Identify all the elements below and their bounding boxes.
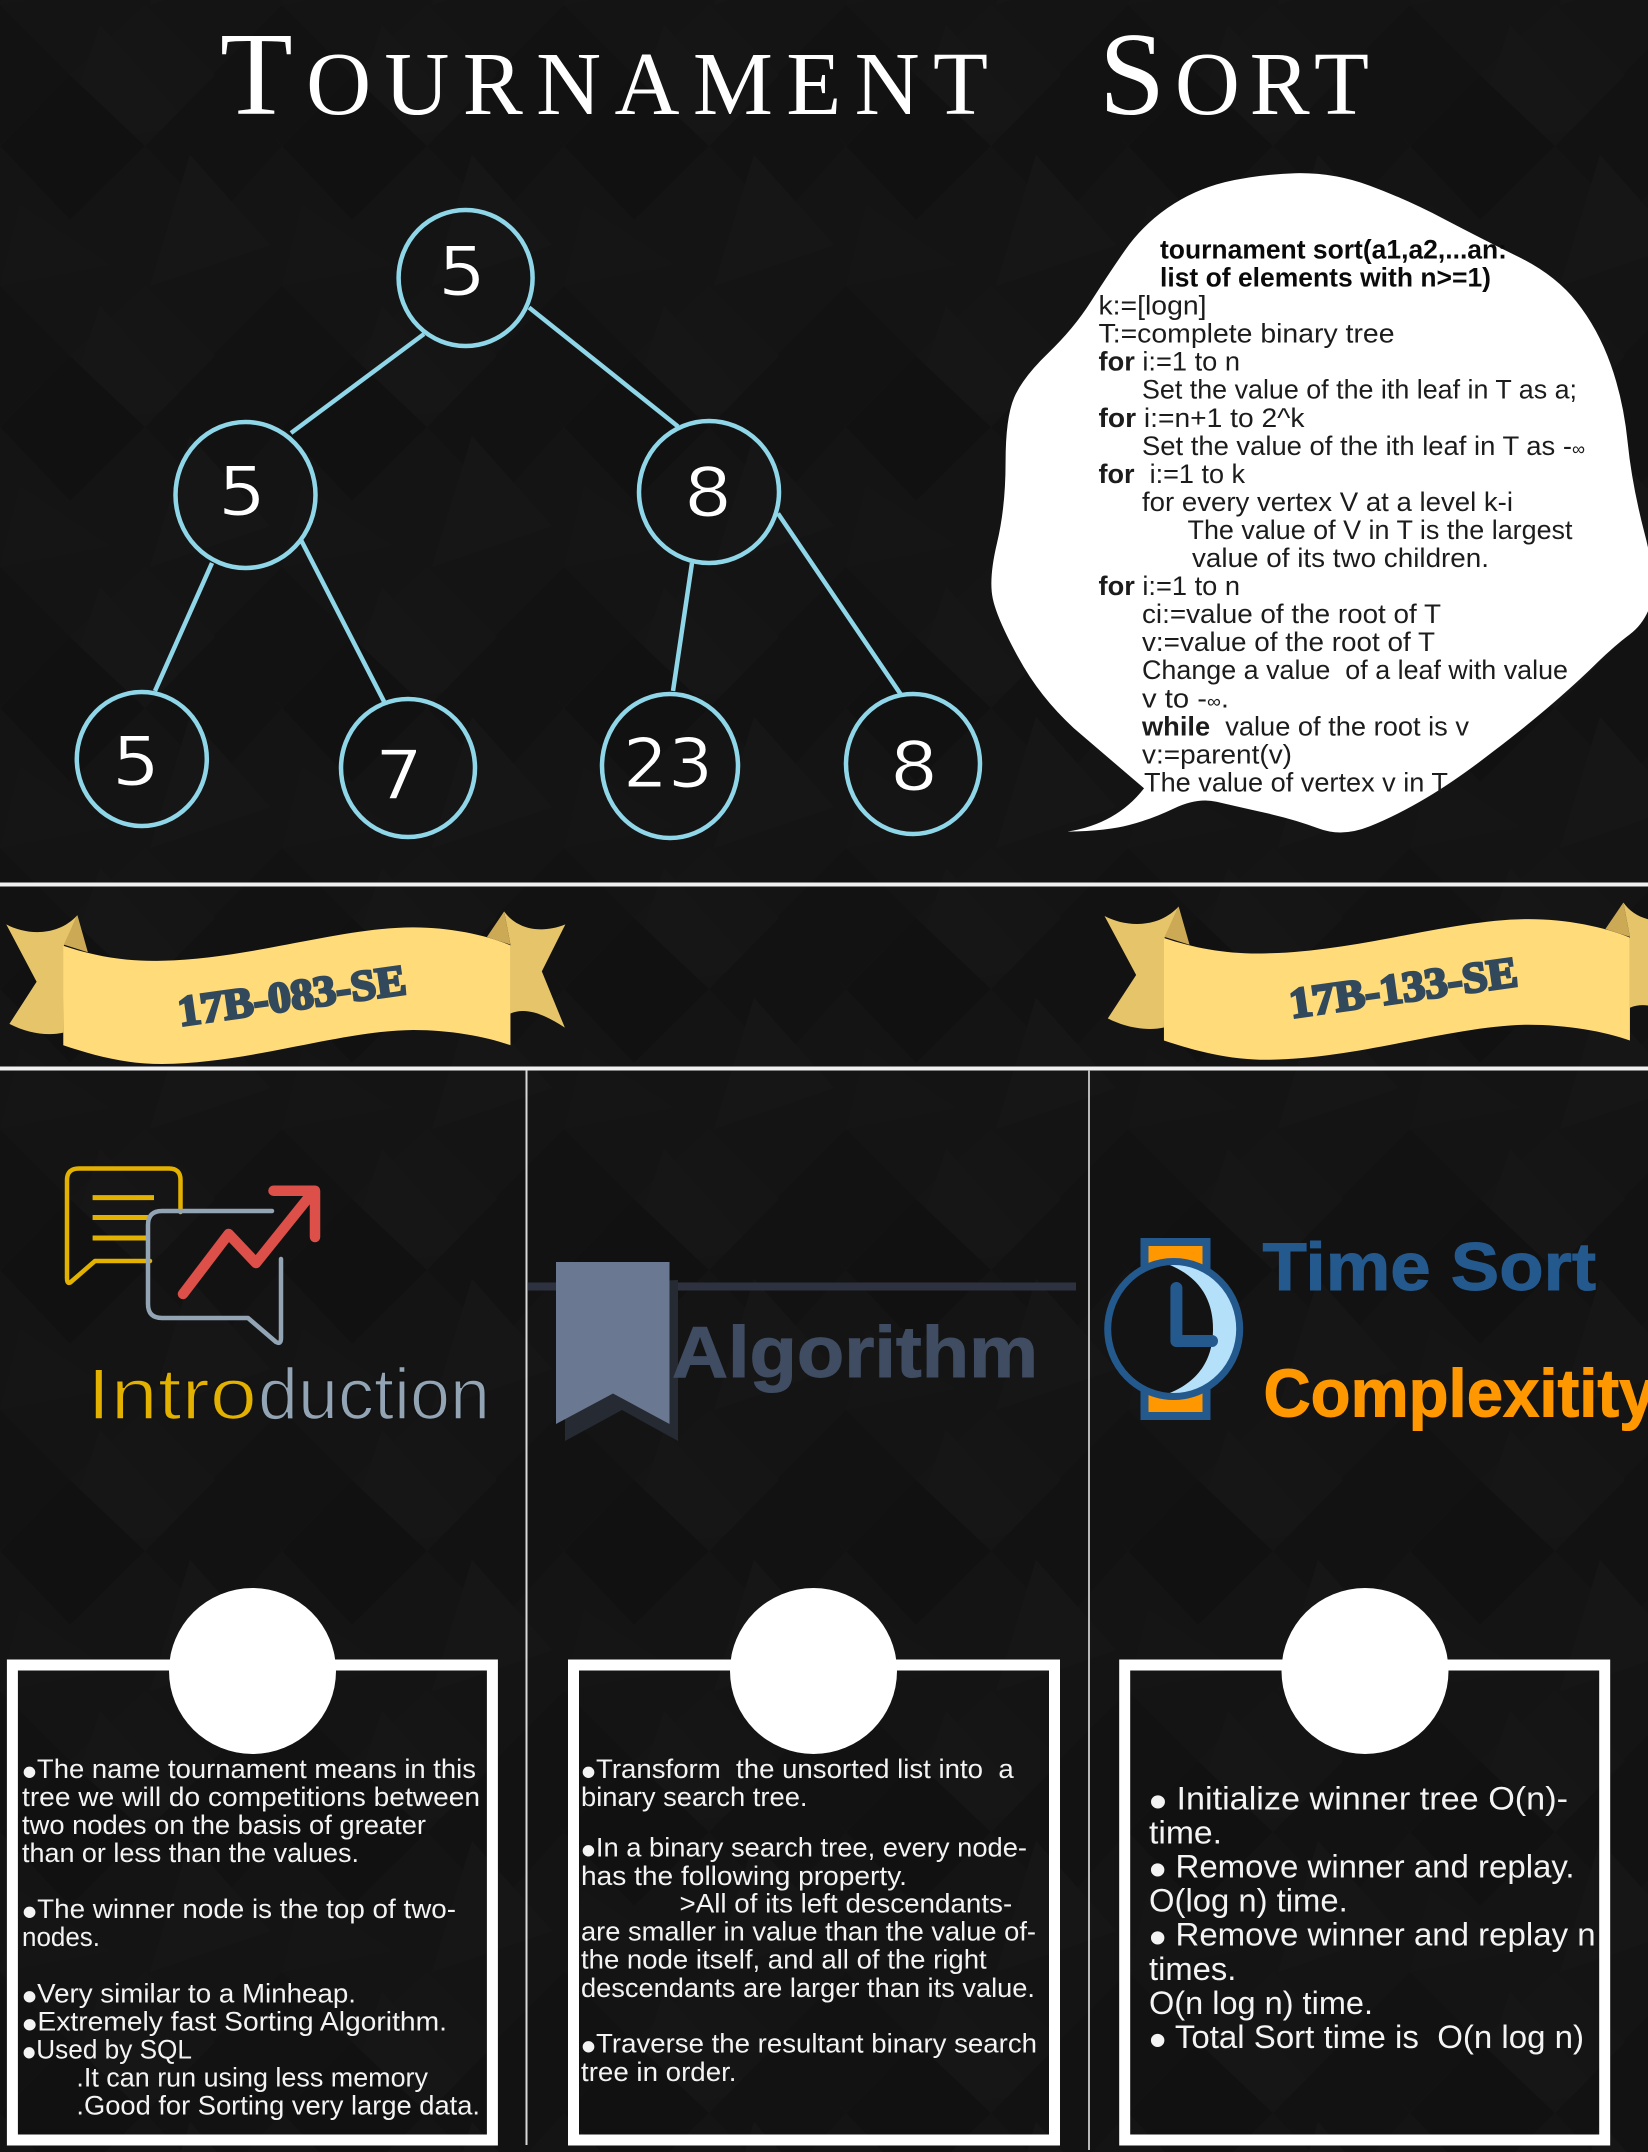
complexity bullets: Remove winner and replay. [1166,1848,1575,1884]
introduction bullets: The winner node is the top of two- [37,1894,456,1924]
panel: algorithm text [574,1588,1054,2140]
title: TOURNAMENT [220,8,988,140]
introduction bullets: Extremely fast Sorting Algorithm. [37,2006,447,2036]
complexity bullets: • [1149,1912,1166,1965]
icon: speech bubbles with rising arrow [67,1168,315,1343]
pseudocode text: for i:=1 to n [1098,347,1240,377]
introduction bullets: • [22,1888,37,1935]
algorithm bullets: Traverse the resultant binary search [596,2029,1037,2059]
algorithm bullets: binary search tree. [581,1782,808,1812]
pseudocode text: tournament sort(a1,a2,...an: [1160,234,1507,264]
ribbon: 17B-133-SE [1105,903,1648,1060]
pseudocode text: Change a value of a leaf with value [1142,655,1568,685]
algorithm bullets: • [581,2023,596,2070]
pseudocode text: for i:=1 to n [1098,571,1240,601]
pseudocode text: v to - ∞. [1142,683,1229,713]
introduction bullets: two nodes on the basis of greater [22,1810,426,1840]
ribbon: 17B-083-SE: 17B-083-SE [175,957,409,1036]
introduction bullets: .Good for Sorting very large data. [76,2090,480,2120]
pseudocode text: Set the value of the ith leaf in T as - ∞ [1142,431,1585,461]
node values: 5 [112,723,160,802]
algorithm bullets: has the following property. [581,1861,907,1891]
introduction bullets: • [22,1748,37,1795]
pseudocode text: for i:=n+1 to 2^k [1098,403,1305,433]
complexity bullets [1149,1776,1596,2068]
introduction bullets: Used by SQL [36,2034,192,2064]
introduction bullets [22,1748,480,2120]
node values: 8 [890,728,938,807]
title [220,8,1369,140]
title: SORT [1099,8,1369,140]
introduction bullets: • [22,2028,36,2076]
pseudocode text: list of elements with n>=1) [1160,262,1491,292]
complexity bullets: • [1149,1776,1167,1829]
heading: Introduction: Intro [87,1355,257,1435]
heading: Introduction [87,1355,490,1435]
icon: watch [1108,1242,1240,1416]
panel: time complexity text [1125,1588,1605,2140]
introduction bullets: The name tournament means in this [37,1754,476,1784]
pseudocode text: for every vertex V at a level k-i [1142,487,1513,517]
speech bubble: pseudocode [991,173,1648,832]
algorithm bullets: >All of its left descendants- [680,1888,1012,1918]
complexity bullets: • [1149,1844,1166,1897]
node values: 5 [438,233,486,312]
ribbon: 17B-133-SE: 17B-133-SE [1286,949,1521,1028]
pseudocode text [1098,234,1585,797]
pseudocode text: The value of vertex v in T [1144,767,1448,797]
algorithm bullets: descendants are larger than its value. [581,1973,1035,2003]
complexity bullets: O(log n) time. [1149,1882,1348,1918]
algorithm bullets: tree in order. [581,2057,736,2087]
complexity bullets: • [1149,2014,1166,2068]
algorithm bullets: Transform the unsorted list into a [596,1754,1015,1784]
complexity bullets: times. [1149,1951,1236,1987]
pseudocode text: ci:=value of the root of T [1142,599,1441,629]
pseudocode text: Set the value of the ith leaf in T as a; [1142,375,1577,405]
introduction bullets: than or less than the values. [22,1838,359,1868]
node values: 7 [375,737,423,816]
complexity bullets: Remove winner and replay n [1166,1917,1596,1953]
pseudocode text: for i:=1 to k [1098,459,1246,489]
introduction bullets: • [22,1972,37,2020]
ribbon: 17B-083-SE [6,911,565,1064]
introduction bullets: Very similar to a Minheap. [37,1978,356,2008]
algorithm bullets: • [581,1748,596,1795]
panel: introduction text [12,1588,492,2140]
complexity bullets: Total Sort time is O(n log n) [1166,2019,1584,2055]
pseudocode text: The value of V in T is the largest [1188,515,1573,545]
introduction bullets: tree we will do competitions between [22,1782,480,1812]
pseudocode text: v:=value of the root of T [1142,627,1435,657]
introduction bullets: nodes. [22,1922,100,1952]
complexity bullets: time. [1149,1815,1222,1851]
pseudocode text: k:=[logn] [1098,291,1206,321]
algorithm bullets: the node itself, and all of the right [581,1945,987,1975]
icon: bookmark with rule [528,1262,1076,1441]
algorithm bullets [581,1748,1037,2087]
algorithm bullets: are smaller in value than the value of- [581,1916,1036,1946]
pseudocode text: v:=parent(v) [1142,739,1292,769]
complexity bullets: O(n log n) time. [1149,1985,1373,2021]
complexity bullets: Initialize winner tree O(n)- [1167,1780,1568,1816]
pseudocode text: value of its two children. [1192,543,1489,573]
pseudocode text: T:=complete binary tree [1098,319,1394,349]
introduction bullets: • [22,2000,37,2048]
algorithm bullets: In a binary search tree, every node- [596,1833,1027,1863]
introduction bullets: .It can run using less memory [76,2062,428,2092]
node values [112,233,938,816]
node values: 23 [623,725,713,804]
heading: Introduction: duction [258,1355,490,1435]
algorithm bullets: • [581,1827,596,1874]
node values: 5 [218,453,266,532]
node values: 8 [684,454,732,533]
heading: Time Sort: Time Sort [1262,1229,1596,1305]
pseudocode text: while value of the root is v [1141,711,1469,741]
binary tree diagram [77,210,980,838]
heading: Algorithm: Algorithm [672,1313,1038,1393]
